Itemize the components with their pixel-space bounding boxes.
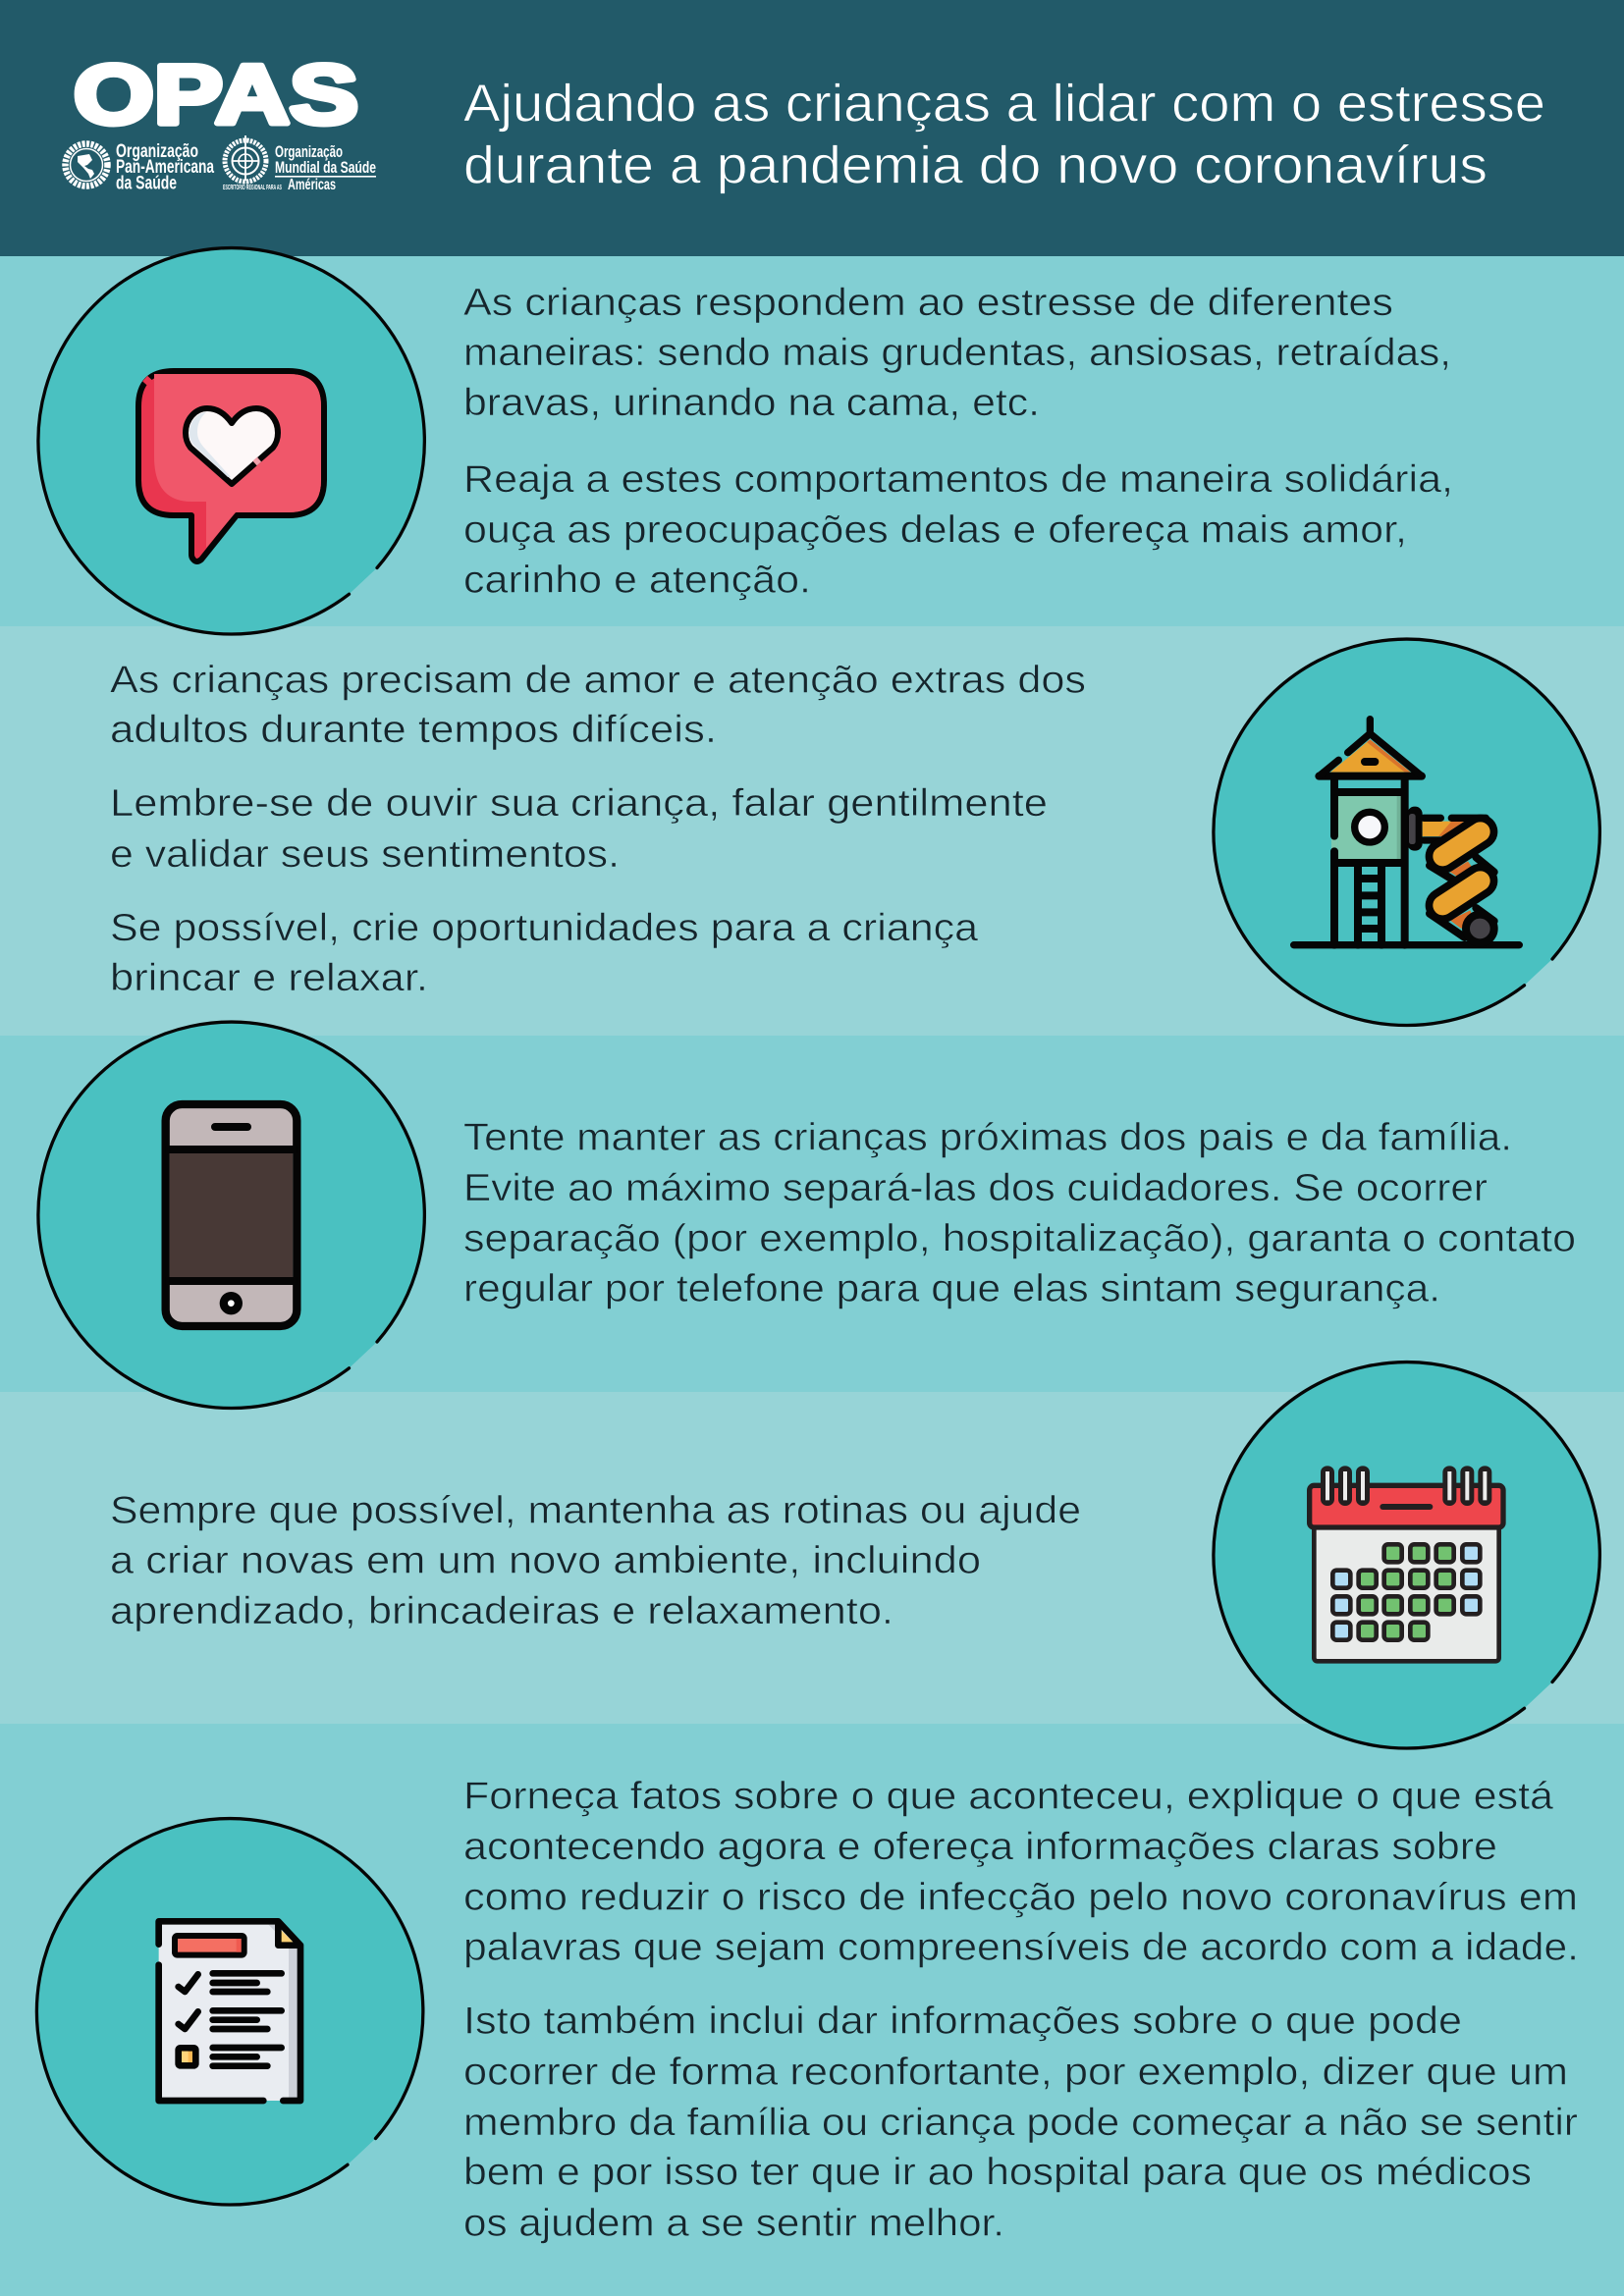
panel: band 3 background [0, 1036, 1624, 1392]
speaker [215, 1115, 247, 1139]
text: band 1: maneiras: sendo mais grudentas, ansiosas, retraídas, [463, 332, 1451, 374]
paper shade [289, 1949, 298, 2098]
icon: checklist document in circle [36, 1819, 423, 2205]
text: band 5 [463, 1775, 1579, 2244]
phone screen [170, 1149, 293, 1281]
phone body [166, 1104, 297, 1326]
text: band 4: a criar novas em um novo ambiente, incluindo [110, 1540, 981, 1582]
text: band 5: Forneça fatos sobre o que aconteceu, explique o que está [463, 1775, 1553, 1817]
bubble highlight [154, 374, 321, 548]
text: band 5: Isto também inclui dar informações sobre o que pode [463, 2001, 1462, 2043]
text: band 3: Tente manter as crianças próximas dos pais e da família. [463, 1117, 1512, 1159]
header pill [1382, 1498, 1430, 1516]
phone drawing [166, 1104, 297, 1326]
red label [175, 1936, 244, 1955]
text: band 5: como reduzir o risco de infecção pelo novo coronavírus em [463, 1876, 1578, 1918]
speech bubble [138, 371, 324, 561]
text: band 1: Reaja a estes comportamentos de maneira solidária, [463, 458, 1453, 501]
playground tower and slide drawing [1294, 720, 1519, 945]
calendar drawing [1310, 1466, 1503, 1661]
text: Organização Pan-Americana da Saúde [116, 141, 214, 194]
text: Organização Mundial da Saúde [223, 142, 376, 193]
bubble outline gap [145, 378, 149, 383]
text: band 3: regular por telefone para que elas sintam segurança. [463, 1268, 1440, 1309]
heart [186, 408, 278, 484]
text: band 3: separação (por exemplo, hospitalização), garanta o contato [463, 1217, 1576, 1260]
document drawing [159, 1921, 300, 2101]
binder rings [1321, 1466, 1491, 1506]
text: band 2 [110, 659, 1086, 999]
text: Organização Mundial da Saúde: Américas [288, 177, 336, 193]
text: band 1: carinho e atenção. [463, 560, 811, 601]
text: band 2: e validar seus sentimentos. [110, 833, 620, 876]
text: band 1: ouça as preocupações delas e ofereça mais amor, [463, 508, 1407, 552]
text: band 2: Lembre-se de ouvir sua criança, falar gentilmente [110, 782, 1048, 825]
text: band 1: bravas, urinando na cama, etc. [463, 382, 1040, 424]
emblem: PAHO [65, 143, 108, 187]
title [463, 75, 1545, 194]
text lines [213, 1973, 282, 2066]
emblem: WHO [225, 135, 266, 182]
text: band 2: As crianças precisam de amor e atenção extras dos [110, 659, 1086, 701]
panel: header band [0, 0, 1624, 256]
text: band 5: ocorrer de forma reconfortante, por exemplo, dizer que um [463, 2051, 1568, 2093]
text: Organização Mundial da Saúde: Mundial da Saúde [275, 158, 376, 177]
circle background [38, 248, 424, 634]
text: band 5: acontecendo agora e ofereça informações claras sobre [463, 1826, 1497, 1868]
yellow checkbox [179, 2048, 195, 2065]
text: Organização Pan-Americana da Saúde: da Saúde [116, 173, 177, 194]
icon: playground slide in circle [1214, 639, 1599, 1026]
text: band 2: brincar e relaxar. [110, 957, 428, 999]
text: band 5: membro da família ou criança pode começar a não se sentir [463, 2102, 1578, 2144]
roof [1330, 739, 1411, 773]
roof vent [1365, 750, 1375, 774]
screen bars [166, 1149, 297, 1281]
text: band 4 [110, 1489, 1081, 1632]
calendar page [1314, 1526, 1499, 1661]
checks [179, 1974, 198, 2029]
roof outline [1294, 720, 1519, 945]
tower frame [1319, 776, 1422, 945]
text: band 4: Sempre que possível, mantenha as rotinas ou ajude [110, 1489, 1081, 1531]
circle background [36, 1819, 423, 2205]
title: durante a pandemia do novo coronavírus [463, 135, 1488, 194]
text: band 5: palavras que sejam compreensíveis de acordo com a idade. [463, 1927, 1579, 1969]
folded corner [281, 1930, 294, 1943]
icon: phone in circle [38, 1022, 424, 1409]
logo wordmark: OPAS [74, 49, 358, 141]
slide top [1423, 822, 1465, 836]
wheel [1466, 915, 1494, 942]
porthole [1355, 812, 1384, 842]
text: band 1 [463, 282, 1453, 601]
slide capsules [1442, 831, 1481, 856]
paper outline [159, 1921, 300, 2101]
text: band 1: As crianças respondem ao estresse de diferentes [463, 282, 1393, 324]
icon: calendar in circle [1214, 1362, 1599, 1748]
slide body back [1430, 857, 1494, 937]
panel: band 5 background [0, 1724, 1624, 2296]
text: band 2: adultos durante tempos difíceis. [110, 709, 717, 751]
panel: band 1 background [0, 256, 1624, 626]
slide joint [1407, 807, 1423, 851]
text: Organização Pan-Americana da Saúde: Pan-Americana [116, 157, 214, 178]
ring highlights [1326, 1471, 1487, 1500]
text: Organização Mundial da Saúde: ESCRITÓRIO REGIONAL PARA AS [223, 183, 282, 191]
title: Ajudando as crianças a lidar com o estresse [463, 75, 1545, 133]
text: band 5: os ajudem a se sentir melhor. [463, 2202, 1004, 2244]
calendar header [1310, 1485, 1503, 1527]
date grid [1332, 1544, 1480, 1640]
circle background [38, 1022, 424, 1409]
text: band 5: bem e por isso ter que ir ao hospital para que os médicos [463, 2152, 1532, 2193]
text: band 2: Se possível, crie oportunidades para a criança [110, 907, 978, 949]
circle background [1214, 1362, 1599, 1748]
panel: band 2 background [0, 626, 1624, 1036]
heart outline gap [255, 459, 259, 463]
text: band 3 [463, 1117, 1576, 1309]
text: band 3: Evite ao máximo separá-las dos cuidadores. Se ocorrer [463, 1167, 1488, 1209]
logo: OPAS [65, 49, 376, 194]
icon: heart speech bubble in circle [38, 248, 424, 634]
home button [220, 1292, 243, 1314]
heart shadow [189, 412, 231, 477]
circle background [1214, 639, 1599, 1026]
tower panel [1338, 796, 1401, 859]
panel: band 4 background [0, 1392, 1624, 1724]
text: Organização Mundial da Saúde: Organização [275, 142, 343, 161]
text: band 4: aprendizado, brincadeiras e relaxamento. [110, 1590, 893, 1632]
paper [159, 1921, 300, 2101]
text: Organização Pan-Americana da Saúde: Organização [116, 141, 198, 162]
